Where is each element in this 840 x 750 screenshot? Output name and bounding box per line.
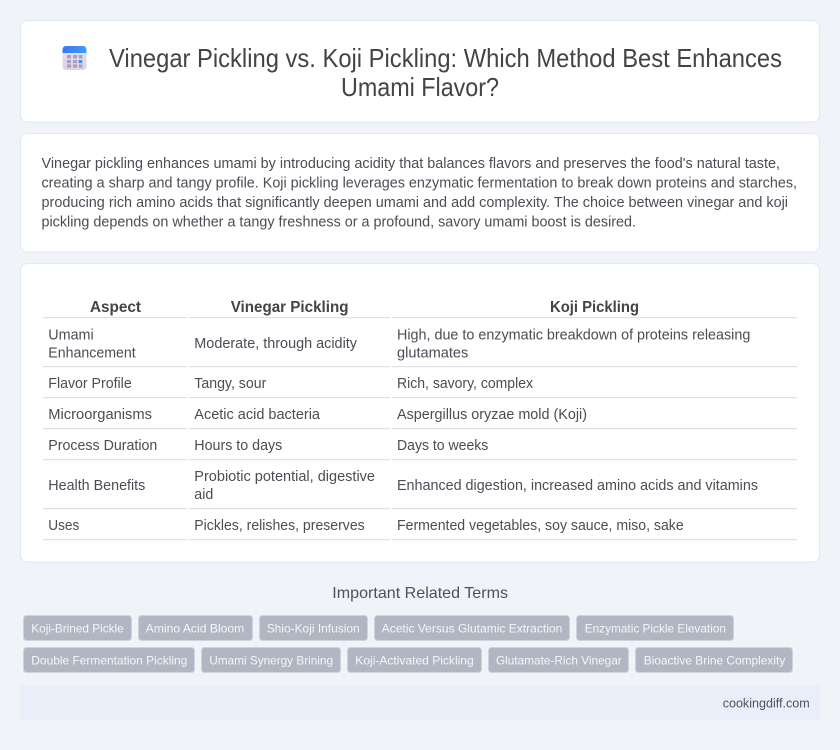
row: process duration: Days to weeks	[397, 438, 488, 454]
intro paragraph	[42, 156, 797, 230]
table header row: Vinegar Pickling	[231, 299, 348, 316]
tag: Shio-Koji Infusion	[260, 616, 368, 640]
row: microorganisms: Microorganisms	[48, 407, 152, 423]
row: microorganisms: Acetic acid bacteria	[194, 407, 320, 423]
tag: Enzymatic Pickle Elevation	[576, 616, 734, 640]
panel: related terms	[24, 585, 792, 672]
tag: Bioactive Brine Complexity: Bioactive Brine Complexity	[644, 653, 785, 667]
row: umami enhancement: glutamates	[397, 345, 468, 361]
tag: Enzymatic Pickle Elevation: Enzymatic Pickle Elevation	[585, 621, 726, 635]
tag: Double Fermentation Pickling	[24, 648, 194, 672]
intro paragraph: Vinegar pickling enhances umami by introducing acidity that balances flavors and preserves the food's natural taste,	[42, 156, 780, 172]
tag: Shio-Koji Infusion: Shio-Koji Infusion	[267, 621, 360, 635]
intro paragraph: creating a sharp and tangy profile. Koji pickling leverages enzymatic fermentation to break down proteins and starches,	[42, 176, 797, 192]
tag: Acetic Versus Glutamic Extraction: Acetic Versus Glutamic Extraction	[382, 621, 562, 635]
tag: Amino Acid Bloom	[138, 616, 252, 640]
row: umami enhancement: Enhancement	[48, 345, 136, 361]
footer source text: cookingdiff.com	[723, 695, 810, 710]
panel: comparison table	[20, 264, 820, 562]
row: uses: Fermented vegetables, soy sauce, miso, sake	[397, 518, 684, 534]
row: health benefits: aid	[194, 487, 213, 503]
row: process duration: Hours to days	[194, 438, 282, 454]
panel: header	[20, 20, 820, 122]
tag: Double Fermentation Pickling: Double Fermentation Pickling	[31, 653, 187, 667]
row: uses: Pickles, relishes, preserves	[194, 518, 365, 534]
row: health benefits	[43, 469, 797, 509]
row: health benefits: Probiotic potential, digestive	[194, 469, 375, 485]
row: umami enhancement: Umami	[48, 327, 94, 343]
table header row	[43, 299, 797, 318]
table header row: Aspect	[90, 299, 142, 316]
tag: Glutamate-Rich Vinegar	[488, 648, 628, 672]
row: flavor profile	[43, 376, 797, 398]
tag: Koji-Brined Pickle: Koji-Brined Pickle	[31, 621, 124, 635]
title: Umami Flavor?	[341, 74, 499, 102]
tag: Umami Synergy Brining	[202, 648, 340, 672]
row: health benefits: Health Benefits	[48, 478, 145, 494]
tag: Koji-Activated Pickling: Koji-Activated Pickling	[355, 653, 474, 667]
intro paragraph: pickling depends on whether a tangy freshness or a profound, savory umami boost is desired.	[42, 214, 636, 230]
row: uses: Uses	[48, 518, 79, 534]
tag: Amino Acid Bloom: Amino Acid Bloom	[146, 621, 244, 635]
row: umami enhancement: Moderate, through acidity	[194, 336, 358, 352]
row: microorganisms	[43, 407, 797, 429]
table header row: Koji Pickling	[550, 299, 639, 316]
panel: intro text	[20, 134, 820, 252]
row: umami enhancement: High, due to enzymatic breakdown of proteins releasing	[397, 327, 750, 343]
row: umami enhancement	[43, 327, 797, 367]
icon: calendar	[62, 46, 86, 70]
row: microorganisms: Aspergillus oryzae mold (Koji)	[397, 407, 587, 423]
title	[109, 45, 782, 102]
row: flavor profile: Rich, savory, complex	[397, 376, 534, 392]
row: flavor profile: Tangy, sour	[194, 376, 266, 392]
row: uses	[43, 518, 797, 540]
heading: related terms: Important Related Terms	[332, 585, 508, 602]
row: process duration: Process Duration	[48, 438, 157, 454]
row: flavor profile: Flavor Profile	[48, 376, 132, 392]
intro paragraph: producing rich amino acids that significantly deepen umami and add complexity. The choice between vinegar and koji	[42, 195, 788, 211]
tag: Koji-Activated Pickling	[348, 648, 482, 672]
row: health benefits: Enhanced digestion, increased amino acids and vitamins	[397, 478, 758, 494]
tag: Umami Synergy Brining: Umami Synergy Brining	[209, 653, 333, 667]
tag: Acetic Versus Glutamic Extraction	[374, 616, 570, 640]
row: process duration	[43, 438, 797, 460]
tag: Glutamate-Rich Vinegar: Glutamate-Rich Vinegar	[496, 653, 622, 667]
tag: Bioactive Brine Complexity	[636, 648, 792, 672]
tag: Koji-Brined Pickle	[24, 616, 132, 640]
footer	[20, 686, 820, 720]
title: Vinegar Pickling vs. Koji Pickling: Which Method Best Enhances	[109, 45, 782, 73]
